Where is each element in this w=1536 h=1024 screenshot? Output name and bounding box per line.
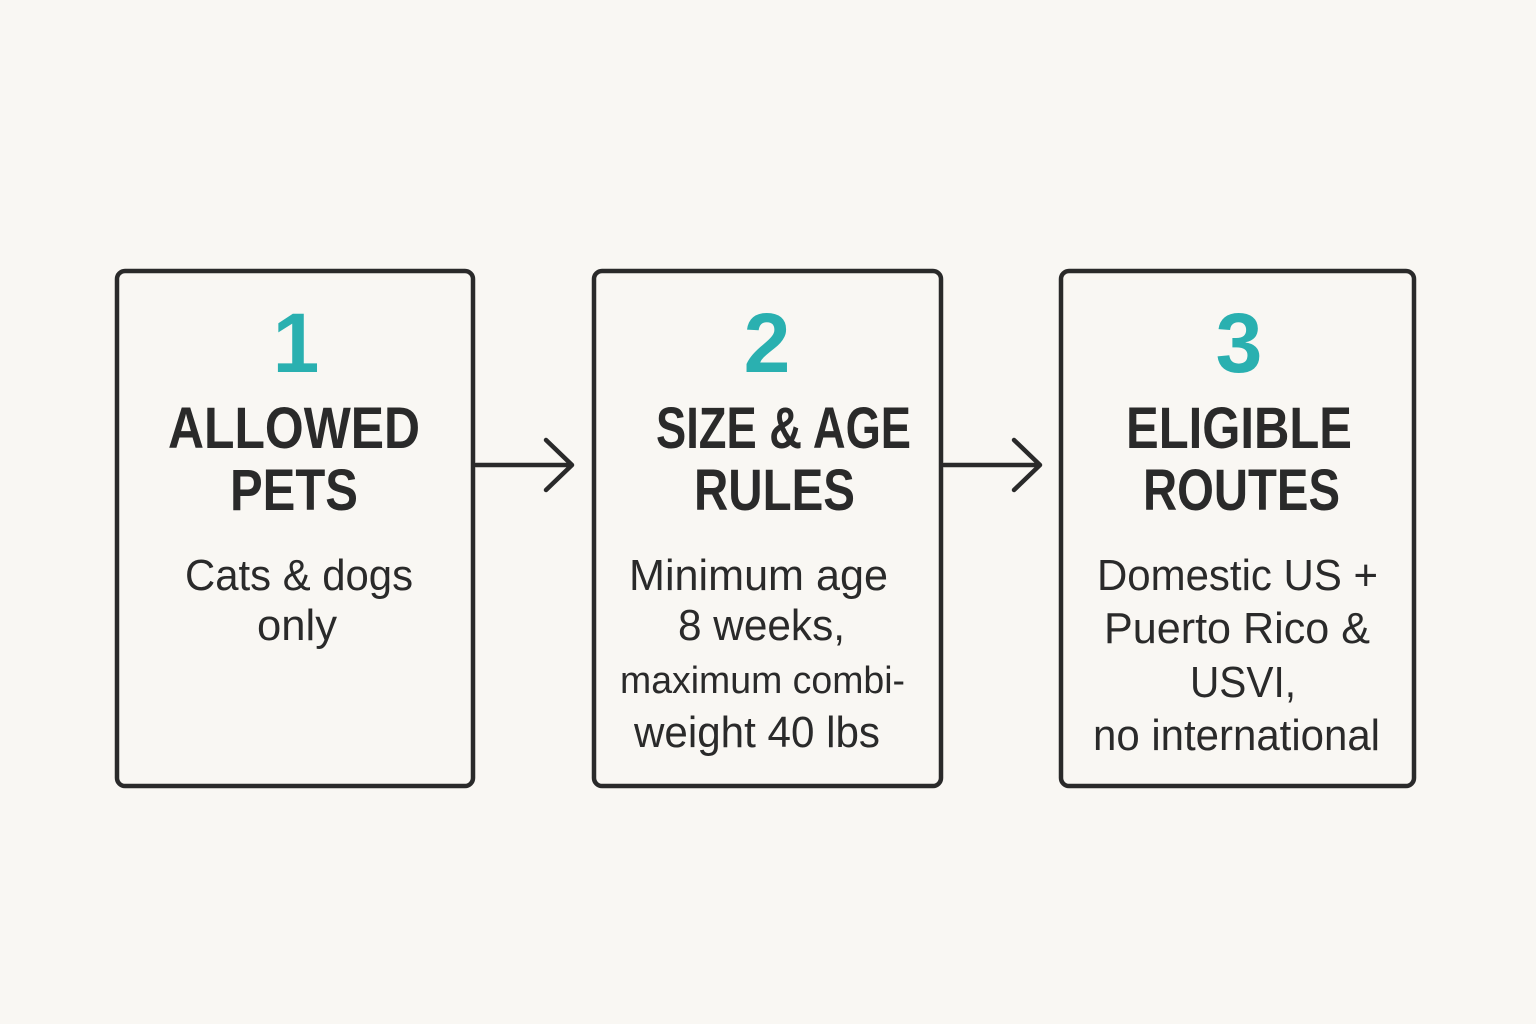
text: age and weight — [620, 551, 905, 757]
text: routes: Domestic US + — [1097, 551, 1378, 600]
heading: allowed pets — [168, 396, 420, 523]
text: routes — [1093, 551, 1380, 760]
text: routes: Puerto Rico & — [1104, 604, 1370, 653]
number 2: 2 — [744, 296, 790, 390]
heading: eligible routes: ROUTES — [1143, 458, 1340, 523]
heading: eligible routes — [1126, 396, 1352, 523]
heading: size & age rules: RULES — [694, 458, 855, 523]
heading: size & age rules — [656, 396, 911, 523]
text: cats & dogs only: Cats & dogs — [185, 551, 413, 600]
text: cats & dogs only: only — [257, 601, 337, 650]
heading: eligible routes: ELIGIBLE — [1126, 396, 1352, 461]
text: routes: no international — [1093, 711, 1380, 760]
panel: eligible routes — [1061, 271, 1414, 786]
text: routes: USVI, — [1190, 658, 1296, 707]
text: age and weight: Minimum age — [629, 551, 888, 600]
arrow 2 — [944, 440, 1040, 490]
arrow 1 — [476, 440, 572, 490]
text: cats & dogs only — [185, 551, 413, 650]
text: age and weight: maximum combi- — [620, 660, 905, 702]
heading: allowed pets: PETS — [230, 458, 358, 523]
panel: size & age rules — [594, 271, 941, 786]
heading: size & age rules: SIZE & AGE — [656, 396, 911, 461]
text: age and weight: weight 40 lbs — [633, 708, 880, 757]
number 3: 3 — [1216, 296, 1262, 390]
text: age and weight: 8 weeks, — [678, 601, 845, 650]
heading: allowed pets: ALLOWED — [168, 396, 420, 461]
panel: allowed pets — [117, 271, 473, 786]
number 1: 1 — [273, 296, 319, 390]
